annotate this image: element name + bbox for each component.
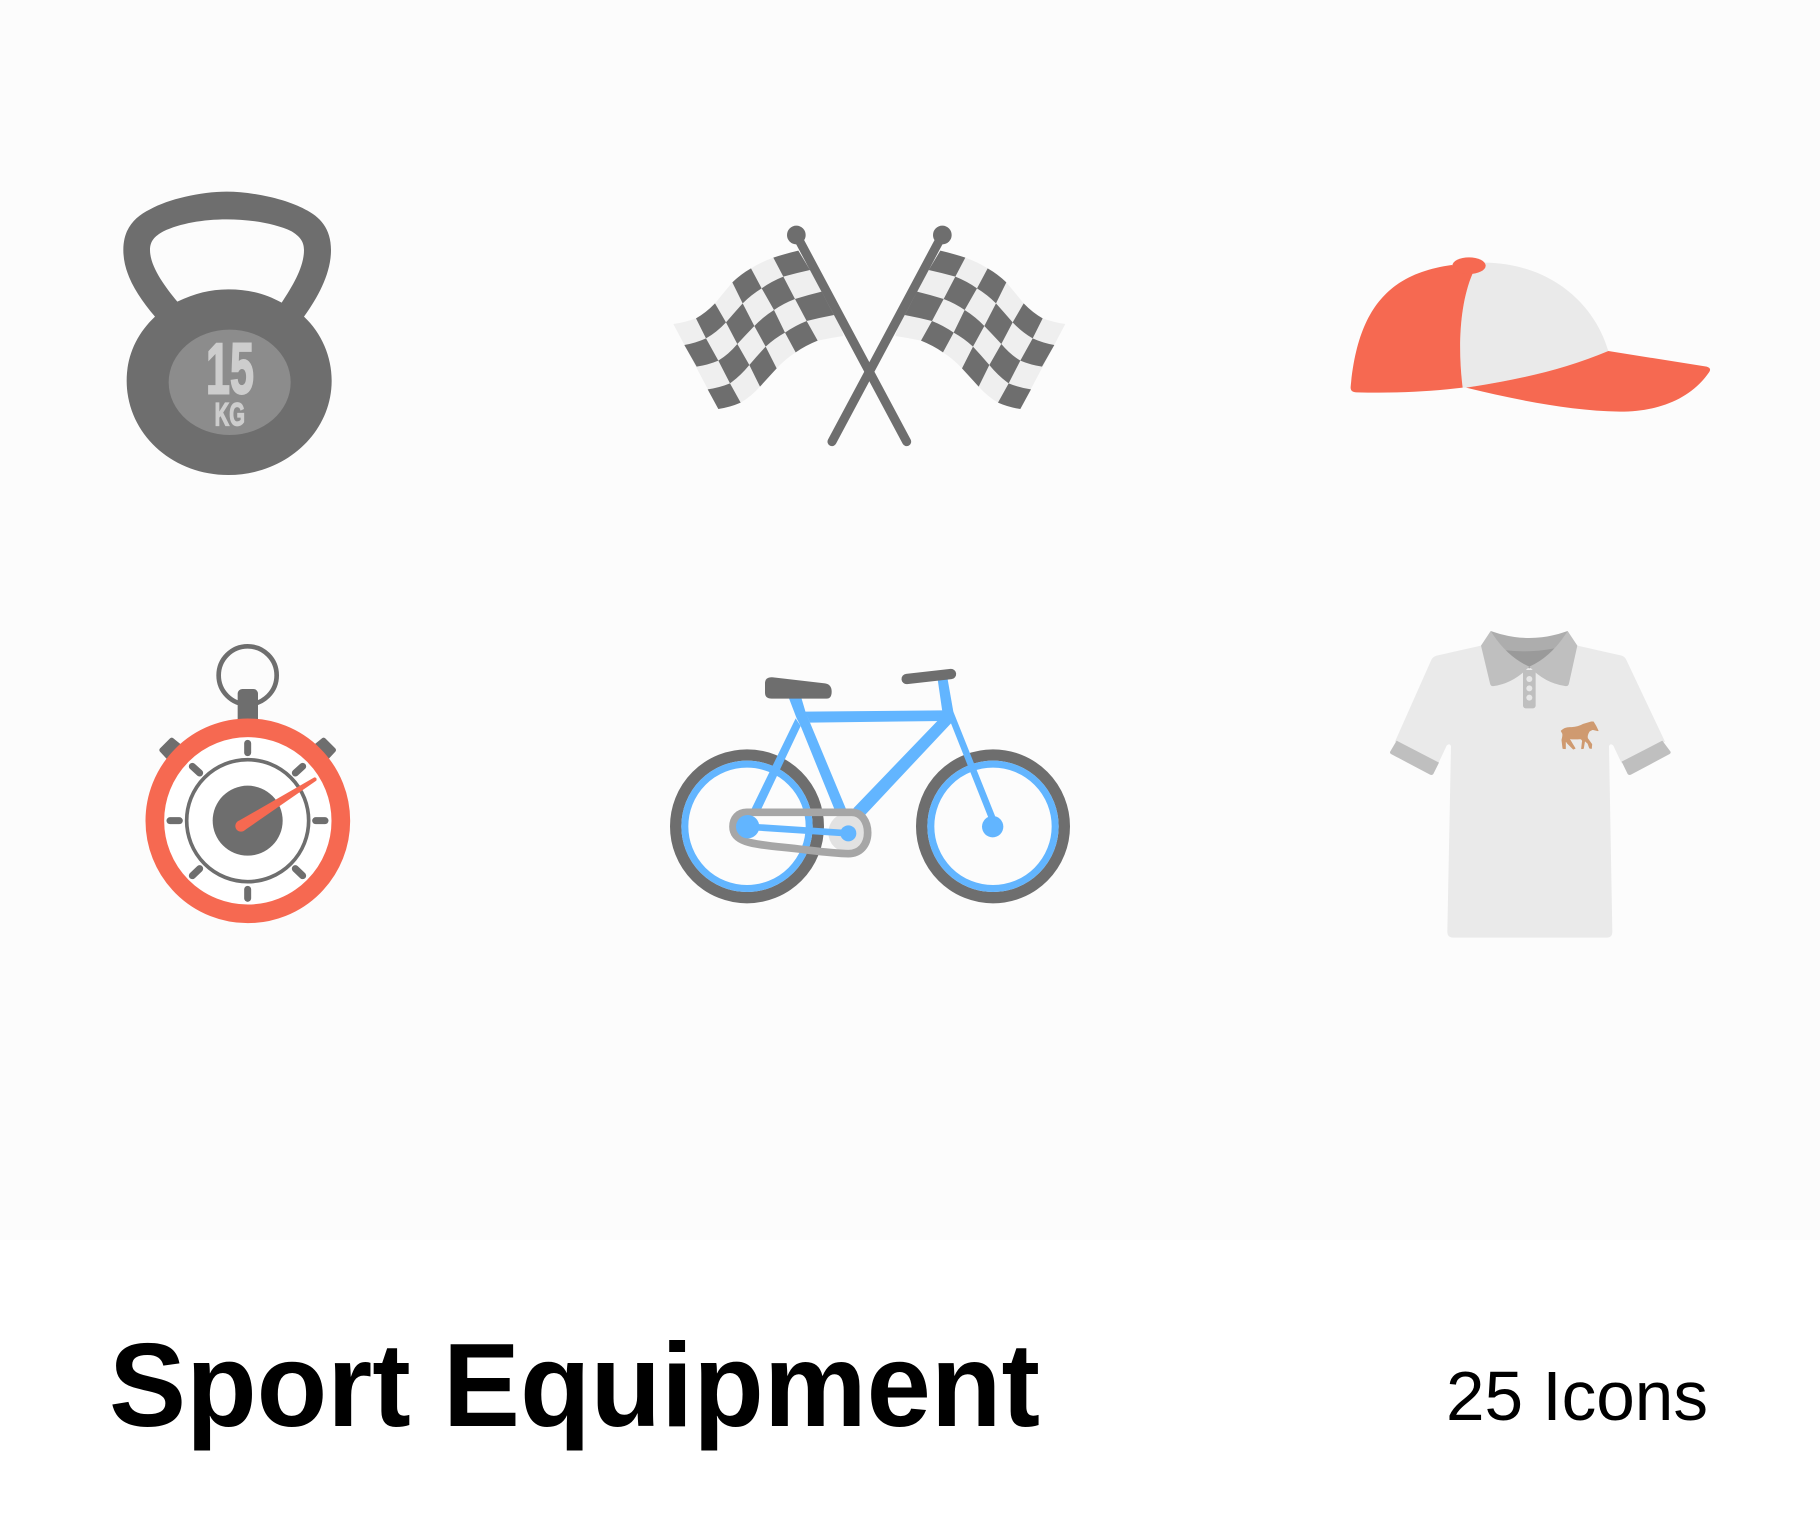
stopwatch neck	[238, 689, 258, 726]
stopwatch case	[155, 728, 341, 914]
left checkered flag	[673, 226, 907, 442]
shirt buttons	[1526, 676, 1532, 701]
icon: polo shirt	[1390, 631, 1671, 938]
collar left flap	[1481, 631, 1529, 686]
icon count: 25 Icons	[1446, 1357, 1708, 1435]
left flag pole	[787, 226, 907, 442]
stopwatch ring	[219, 646, 277, 704]
kettlebell weight unit: KG	[215, 397, 245, 433]
stopwatch side buttons	[162, 740, 334, 758]
chain	[733, 812, 868, 854]
horse logo	[1561, 722, 1598, 749]
kettlebell weight value: 15	[206, 328, 254, 409]
cap button	[1452, 257, 1486, 274]
cap crown orange panel	[1351, 265, 1473, 393]
icon: baseball cap	[1351, 257, 1710, 412]
right sleeve cuff	[1622, 741, 1671, 775]
icon: kettlebell	[123, 192, 332, 475]
front hub	[982, 816, 1003, 837]
icon: bicycle	[676, 674, 1064, 898]
placket	[1523, 670, 1536, 708]
right checkered flag	[832, 226, 1065, 442]
stopwatch needle	[235, 777, 317, 832]
chain stay	[748, 827, 848, 833]
collar inside back	[1491, 631, 1568, 668]
front wheel	[922, 755, 1064, 898]
cap crown white panel	[1460, 263, 1608, 388]
icon: stopwatch	[155, 646, 341, 914]
stopwatch tick marks	[170, 743, 325, 898]
collar right flap	[1529, 631, 1577, 686]
kettlebell weight plate	[169, 330, 291, 435]
cap brim	[1466, 351, 1710, 412]
bicycle frame	[751, 679, 997, 820]
collar inner shadow	[1503, 648, 1554, 667]
handlebar	[907, 674, 951, 679]
title: Sport Equipment	[109, 1319, 1040, 1452]
saddle	[765, 677, 832, 699]
left sleeve cuff	[1390, 741, 1439, 775]
shirt body	[1395, 646, 1665, 938]
icon: crossed checkered flags	[673, 226, 1065, 442]
pedal hub	[840, 825, 856, 841]
stopwatch center disc	[213, 786, 283, 856]
chainring	[828, 813, 868, 853]
rear hub	[736, 815, 759, 838]
stopwatch inner dial	[187, 760, 309, 882]
rear wheel	[676, 755, 818, 898]
